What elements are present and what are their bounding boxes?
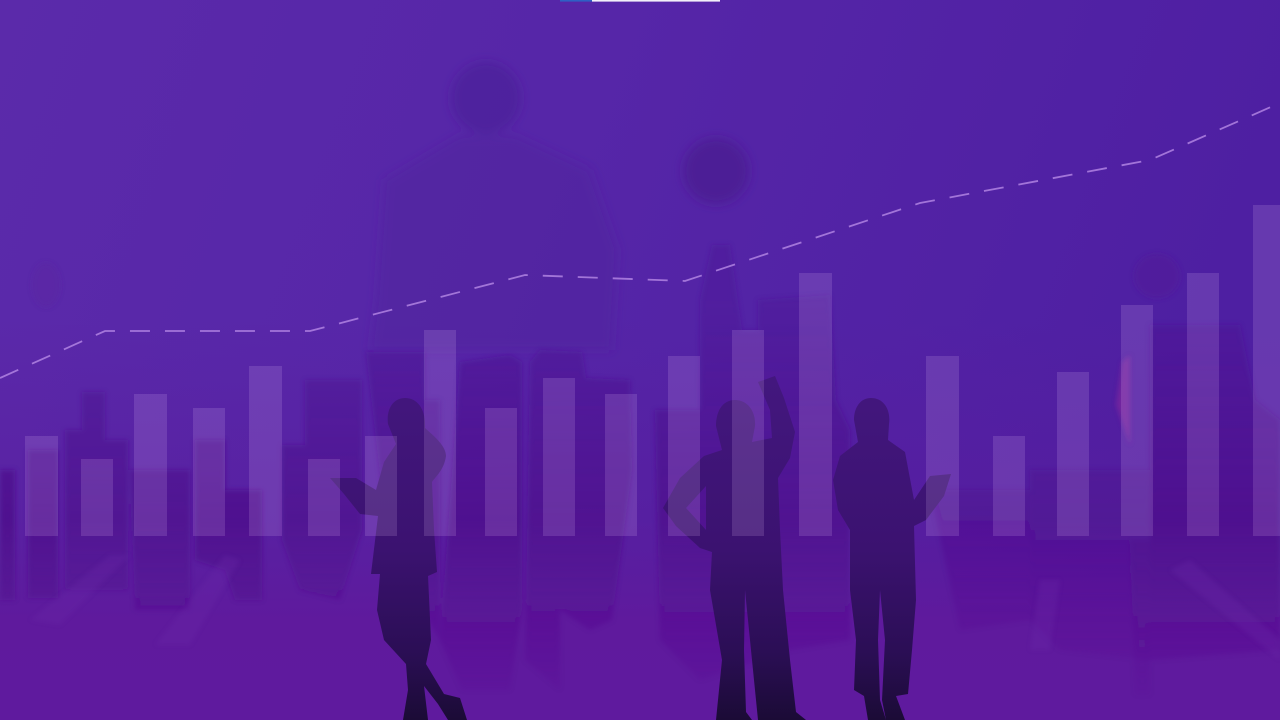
diagonal crosswalk stripes [30, 555, 1280, 660]
silhouette: man pointing upward [663, 376, 806, 720]
silhouette: woman reading a book [833, 398, 951, 720]
dashed trend line [0, 103, 1280, 378]
ghost figures: two large business people [370, 62, 749, 350]
top progress bar [560, 0, 720, 2]
silhouette: woman with tablet [330, 398, 467, 720]
bar chart [25, 205, 1280, 536]
blurred city skyline and crowd [0, 245, 1280, 695]
